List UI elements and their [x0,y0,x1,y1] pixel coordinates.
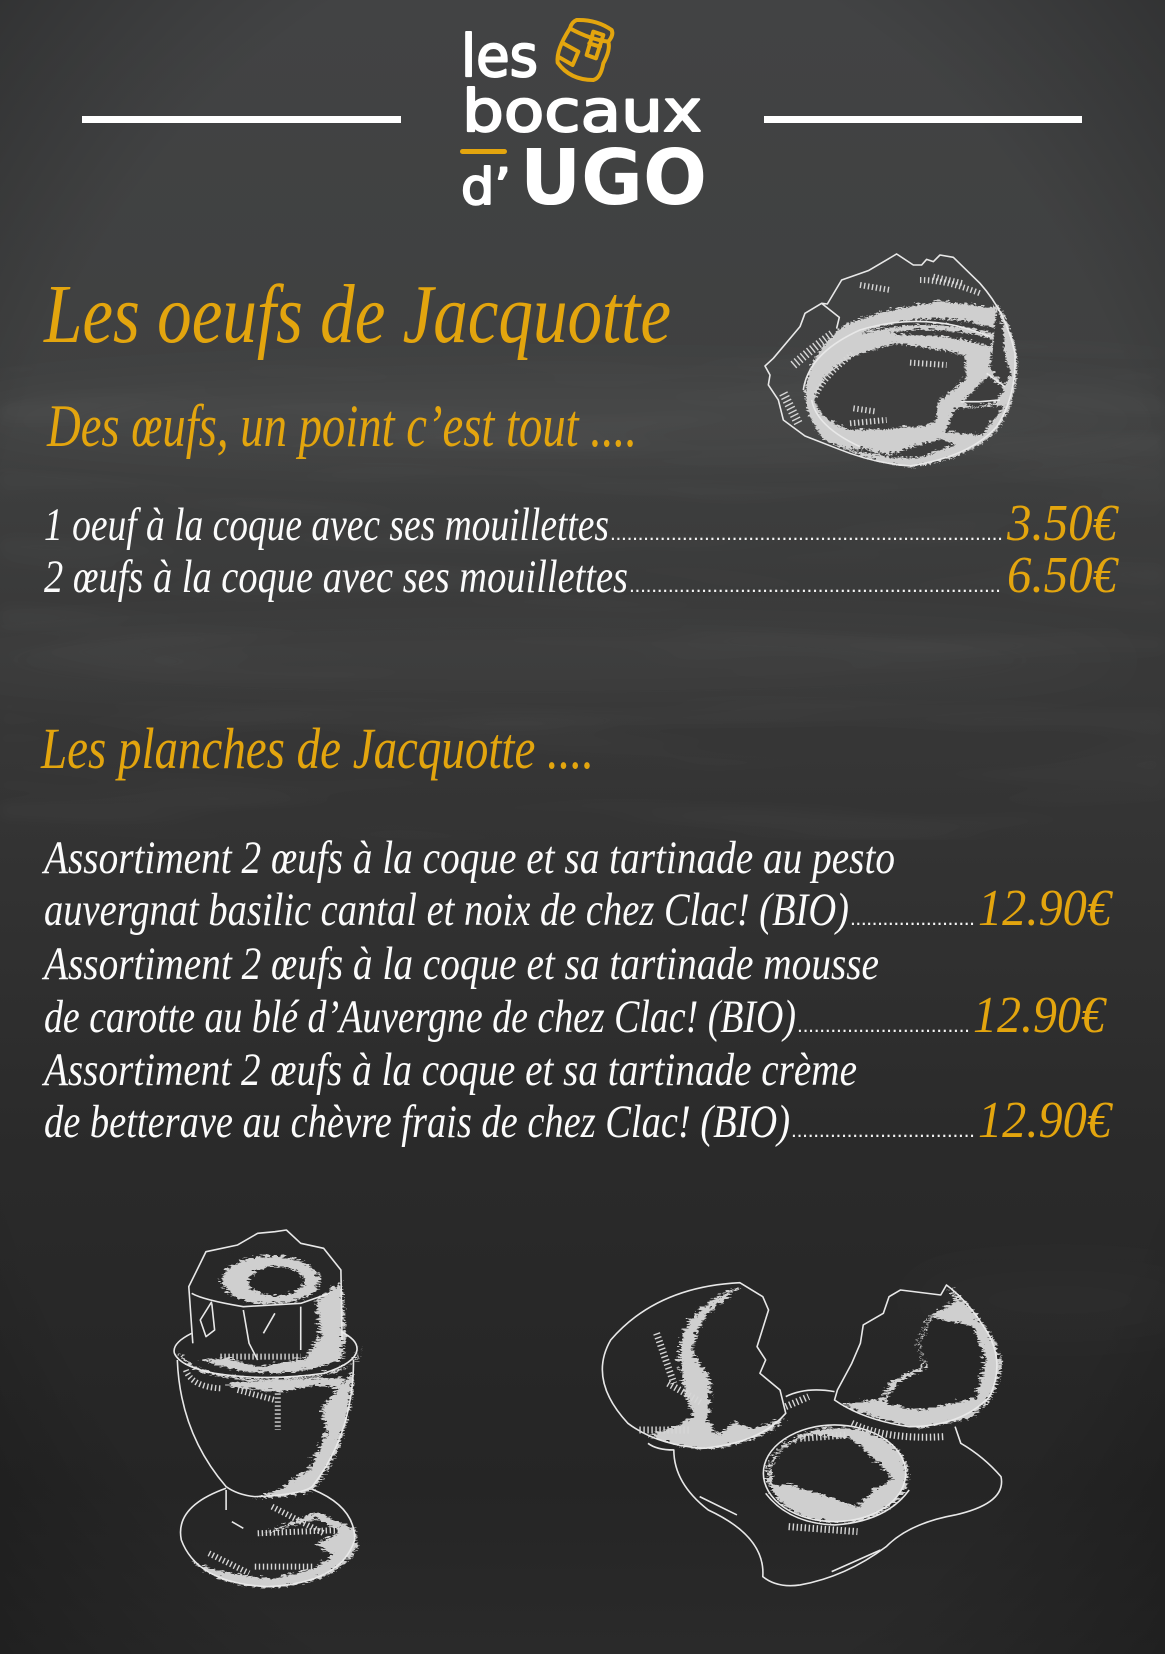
menu line: 2 oeufs: ................................................................... [629,574,1001,597]
menu line: 1 oeuf: ....................................................................... [610,522,1003,545]
menu item: carrot board: Assortiment 2 œufs à la coque et sa tartinade mousse [41,938,879,990]
yolk and white details [700,1490,909,1572]
menu item: pesto board: Assortiment 2 œufs à la coque et sa tartinade au pesto [41,832,895,884]
shell inner rims [803,303,1005,447]
menu line: 1 oeuf: 1 oeuf à la coque avec ses mouillettes [44,499,609,551]
heading: des oeufs: Des œufs, un point c’est tout .... [46,393,637,459]
menu item: beetroot board: 12.90€ [978,1092,1114,1149]
menu item: pesto board: auvergnat basilic cantal et noix de chez Clac! (BIO) [44,884,849,936]
right shell outline [835,1285,997,1427]
cup body [177,1360,354,1497]
icon: jar [557,20,612,80]
egg and cup outlines [189,1230,342,1343]
illustration: empty egg shell [765,254,1015,466]
egg and cup shading [174,1254,357,1586]
egg white top [786,1390,835,1397]
menu item: beetroot board: ................................. [791,1119,975,1142]
illustration: soft-boiled egg in cup [174,1230,357,1587]
menu line: 2 oeufs: 2 œufs à la coque avec ses mouillettes [44,551,628,603]
heading: les planches: Les planches de Jacquotte .... [40,716,594,781]
menu line: 1 oeuf: 3.50€ [1006,495,1120,552]
cracks and drip [192,1293,329,1360]
cup rim [174,1332,357,1377]
shell hatching [783,333,833,423]
logo word bocaux: bocaux [462,77,702,145]
menu item: carrot board: 12.90€ [973,987,1108,1044]
cup hatching [186,1357,341,1573]
header rule left [82,116,401,123]
menu item: carrot board: de carotte au blé d’Auvergne de chez Clac! (BIO) [44,991,796,1043]
menu item: carrot board [41,938,1108,1044]
logo word UGO: UGO [520,134,707,223]
illustration: cracked egg with yolk [602,1283,1002,1586]
egg white outline [648,1427,1002,1586]
menu line: 2 oeufs: 6.50€ [1007,547,1120,604]
logo word les: les [461,22,538,90]
logo accent bar [460,149,507,154]
menu item: pesto board [41,832,1114,937]
menu line: 2 oeufs [44,547,1120,604]
menu item: beetroot board: Assortiment 2 œufs à la coque et sa tartinade crème [41,1044,857,1096]
menu item: carrot board: ............................... [797,1014,970,1037]
menu item: beetroot board [41,1044,1114,1149]
menu item: pesto board: 12.90€ [978,880,1114,937]
menu line: 1 oeuf [44,495,1120,552]
header rule right [764,116,1082,123]
title: Les oeufs de Jacquotte [43,268,671,361]
broken egg hatching [639,1333,944,1532]
cup base [181,1488,355,1587]
shell shading [803,299,1015,465]
logo: les bocaux d'Ugo [460,20,707,223]
shell fine hatching [815,277,980,423]
left shell outline [602,1283,786,1448]
yolk outline [763,1425,906,1522]
logo word d': d’ [461,158,511,216]
shell outlines [765,254,1015,466]
menu item: pesto board: ....................... [850,907,975,930]
menu item: beetroot board: de betterave au chèvre frais de chez Clac! (BIO) [44,1096,790,1148]
shell and yolk shading [645,1285,998,1521]
